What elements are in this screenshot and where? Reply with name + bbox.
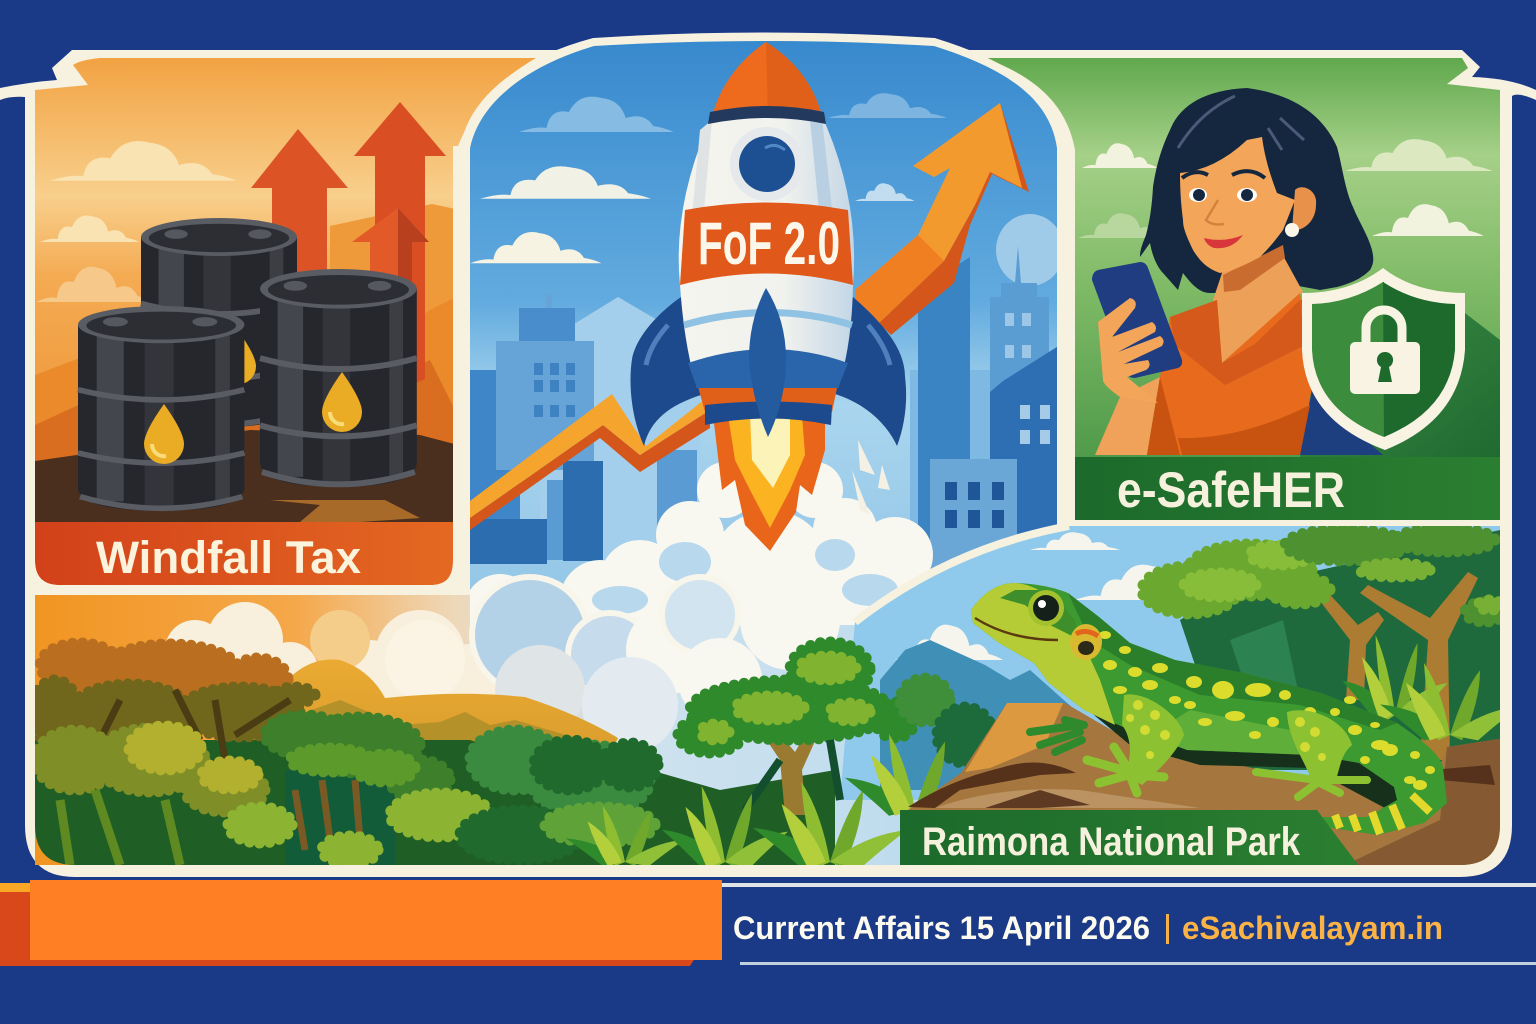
arm	[1095, 377, 1160, 455]
tree left of rock	[900, 678, 950, 722]
tail stripes	[1335, 795, 1430, 834]
shield with padlock	[1302, 268, 1465, 450]
eyes	[1189, 188, 1207, 202]
growth arrow	[470, 103, 1029, 530]
woman	[1092, 88, 1383, 455]
mountains	[330, 204, 453, 314]
panel outline	[1070, 150, 1505, 525]
dark back band	[1068, 593, 1397, 730]
footer caption: Current Affairs 15 April 2026	[733, 910, 1150, 946]
cream clouds	[166, 602, 496, 698]
mouth	[1204, 235, 1243, 248]
face	[1180, 137, 1295, 273]
ear	[1292, 187, 1316, 230]
red ribbon	[0, 892, 695, 966]
neck	[1213, 250, 1303, 363]
rock	[900, 703, 1505, 870]
separator	[1166, 914, 1169, 944]
nose cone	[712, 42, 822, 116]
golden hills	[244, 660, 618, 744]
footer rules	[722, 883, 1536, 887]
panel: Raimona National Park foreground	[31, 526, 1520, 870]
banner	[680, 202, 853, 285]
padlock	[1366, 310, 1402, 345]
right forest	[1142, 528, 1520, 770]
label: e-SafeHER: e-SafeHER	[1117, 462, 1345, 518]
nose	[1206, 200, 1224, 224]
label: Windfall Tax: Windfall Tax	[96, 532, 361, 583]
nozzle	[697, 383, 838, 412]
orange bar	[30, 880, 722, 960]
rocket exhaust smoke	[470, 462, 933, 625]
city skyline	[470, 246, 1060, 569]
hair	[1140, 88, 1373, 293]
hair highlights	[1178, 96, 1304, 150]
clouds: green sky	[1078, 139, 1493, 238]
blouse	[1147, 293, 1312, 455]
label strip: e-SafeHER	[1075, 457, 1505, 521]
lower belly blotches	[1150, 710, 1310, 755]
hand	[1098, 298, 1164, 403]
mouth	[975, 618, 1058, 640]
panel: Windfall Tax	[30, 50, 550, 590]
clouds: center sky	[470, 93, 1064, 286]
phone	[1092, 262, 1182, 378]
lizard sky	[840, 526, 1505, 800]
shadow	[1070, 695, 1405, 815]
panel: lower landscape background	[35, 595, 1035, 865]
front foot	[1087, 747, 1164, 793]
front leg	[1122, 694, 1184, 785]
panel outline	[465, 38, 1062, 524]
label: Raimona National Park: Raimona National Park	[922, 820, 1301, 864]
accent tab	[0, 883, 30, 893]
oil barrels	[78, 218, 417, 511]
spots	[1099, 631, 1435, 790]
panel: e-SafeHER	[985, 50, 1505, 525]
eye	[1028, 590, 1064, 626]
left forest	[31, 643, 835, 865]
website: eSachivalayam.in	[1182, 910, 1443, 946]
far foot	[1030, 720, 1084, 752]
flame	[713, 415, 825, 551]
lizard	[971, 583, 1447, 835]
divider curve	[855, 526, 1069, 622]
fronds	[566, 734, 985, 868]
footer bar	[0, 880, 1536, 966]
body	[971, 583, 1447, 835]
middle tree	[678, 642, 915, 815]
ear	[1070, 624, 1102, 660]
back leg	[1287, 710, 1352, 782]
tree shadow left of rock	[937, 707, 993, 763]
clouds: windfall sky	[36, 141, 237, 302]
red arrows	[251, 102, 446, 400]
center fin	[749, 288, 786, 437]
back foot	[1256, 772, 1367, 797]
body	[679, 116, 854, 388]
label strip: Raimona	[900, 810, 1359, 866]
blue smoke clouds	[472, 570, 840, 753]
rocket	[630, 42, 906, 620]
ground	[35, 430, 458, 530]
hill	[1300, 290, 1500, 460]
fins	[630, 297, 710, 446]
blue hills	[880, 640, 1075, 790]
navy undershirt	[1300, 390, 1383, 455]
window	[730, 127, 804, 201]
rocket label: FoF 2.0	[698, 210, 840, 277]
head and neck	[971, 583, 1115, 725]
brows	[1182, 171, 1265, 178]
label strip: windfall	[30, 522, 470, 588]
panel outline	[30, 146, 458, 590]
exhaust trail	[735, 535, 800, 620]
debris	[852, 440, 890, 515]
clouds: lizard sky	[895, 532, 1156, 660]
